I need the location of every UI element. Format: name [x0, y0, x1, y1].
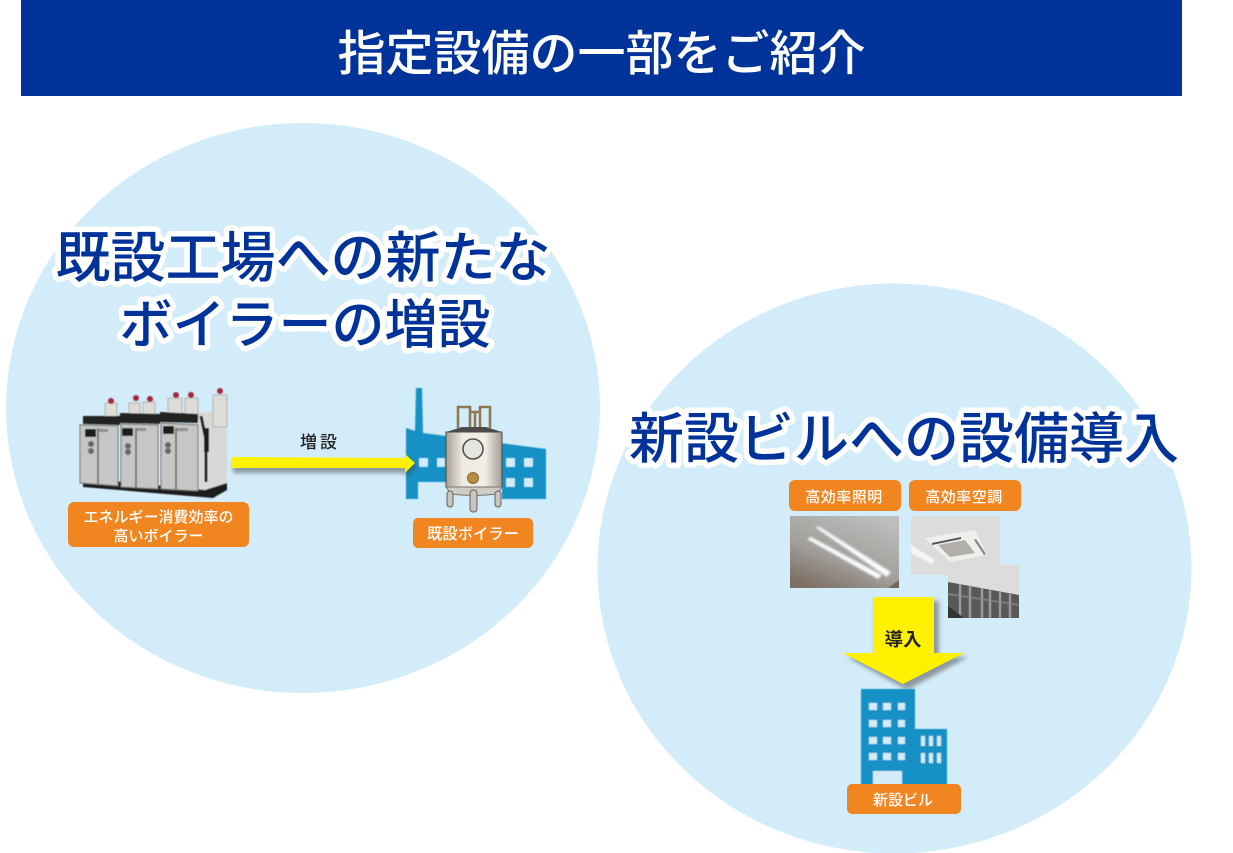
- icon: high efficiency boilers: [80, 388, 227, 498]
- title banner: [21, 0, 1182, 96]
- icon: factory with existing boiler: [406, 388, 546, 512]
- circle background right: [598, 284, 1192, 853]
- icon: new building: [861, 689, 947, 789]
- label: high efficiency air conditioning: 高効率空調: [925, 489, 1003, 506]
- arrow: add boiler: [232, 433, 417, 477]
- arrow: introduce equipment: [843, 597, 968, 690]
- panel: new building equipment: [598, 284, 1192, 853]
- title banner: 指定設備の一部をご紹介: [337, 28, 866, 81]
- label: new building: [847, 784, 961, 814]
- label: high efficiency lighting: 高効率照明: [805, 489, 883, 506]
- label: new building: 新設ビル: [873, 792, 933, 809]
- label: existing boiler: [413, 518, 533, 548]
- label: existing boiler: 既設ボイラー: [427, 526, 519, 543]
- label: high efficiency boiler: エネルギー消費効率の: [83, 509, 234, 526]
- label: high efficiency air conditioning: [909, 480, 1021, 511]
- heading: existing factory: ボイラーの増設: [120, 296, 490, 355]
- photo: outdoor air conditioning unit: [948, 565, 1019, 618]
- heading: existing factory: 既設工場への新たな: [55, 227, 551, 289]
- label: high efficiency boiler: [68, 502, 249, 547]
- circle background left: [6, 123, 600, 693]
- label: addition: 増設: [300, 433, 340, 452]
- label: high efficiency boiler: 高いボイラー: [113, 528, 204, 545]
- photo: ceiling air conditioner: [911, 516, 1000, 575]
- photo: lighting: [790, 516, 899, 588]
- heading: new building: 新設ビルへの設備導入: [629, 408, 1179, 470]
- label: high efficiency lighting: [789, 480, 901, 511]
- label: introduction: 導入: [884, 629, 922, 650]
- panel: existing factory boiler: [6, 123, 600, 693]
